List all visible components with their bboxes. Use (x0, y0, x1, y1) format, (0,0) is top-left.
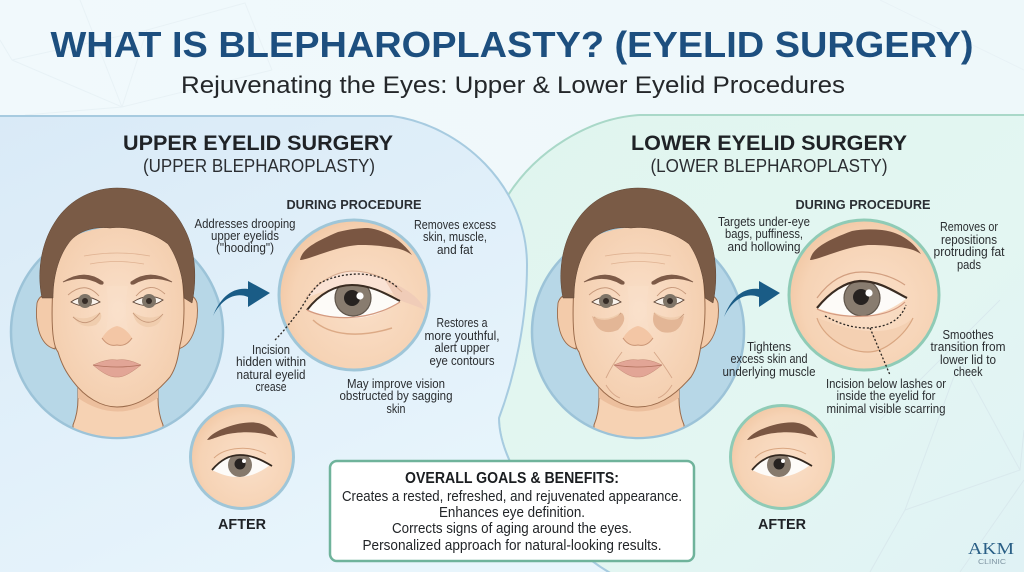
logo: AKM (968, 539, 1014, 558)
callout: targets: bags, puffiness, (725, 227, 803, 241)
logo (968, 539, 1014, 566)
callout: restores (424, 316, 500, 368)
illustration: after upper (190, 406, 294, 508)
callout: removes excess (414, 218, 496, 257)
logo: CLINIC (978, 559, 1006, 566)
arrow: upper (213, 281, 270, 316)
callout: overall goals and benefits: Creates a rested, refreshed, and rejuvenated appearance. (342, 489, 682, 505)
callout: incision lower: Incision below lashes or (826, 377, 946, 391)
arrow: lower (724, 281, 780, 317)
heading: during procedure upper: DURING PROCEDURE (286, 197, 422, 212)
callout: removes or repositions (934, 220, 1005, 272)
illustration: after lower (730, 406, 834, 508)
callout: overall goals and benefits (330, 461, 694, 561)
callout: smoothes: cheek (954, 365, 983, 379)
callout: smoothes: lower lid to (940, 353, 996, 367)
callout: drooping: Addresses drooping (194, 217, 296, 231)
callout: restores: alert upper (434, 341, 490, 355)
heading: upper eyelid surgery: UPPER EYELID SURGERY (123, 131, 393, 155)
heading: upper eyelid surgery (123, 131, 393, 176)
callout: tightens: Tightens (747, 340, 791, 354)
callout: incision lower: minimal visible scarring (826, 402, 946, 416)
illustration: upper eye during procedure (275, 220, 429, 370)
callout: incision upper: crease (256, 380, 286, 394)
label: after upper: AFTER (218, 517, 267, 533)
callout: vision (340, 377, 452, 416)
heading: lower eyelid surgery (631, 131, 907, 176)
callout: drooping: ("hooding") (216, 241, 274, 255)
callout: targets (718, 215, 810, 254)
callout: overall goals and benefits: Corrects signs of aging around the eyes. (392, 521, 632, 537)
callout: incision upper (236, 343, 306, 394)
callout: removes or repositions: pads (957, 258, 981, 272)
heading: during procedure lower: DURING PROCEDURE (796, 197, 931, 212)
illustration: face before upper surgery (11, 188, 223, 445)
callout: tightens (722, 340, 816, 379)
callout: smoothes: Smoothes (942, 328, 994, 342)
callout: vision: obstructed by sagging (340, 389, 452, 403)
callout: removes excess: Removes excess (414, 218, 496, 232)
callouts: upper eyelid (194, 217, 500, 416)
callout: tightens: excess skin and (730, 352, 808, 366)
callout: incision lower (826, 377, 946, 416)
callout: incision lower: inside the eyelid for (836, 389, 936, 403)
heading: upper eyelid surgery: (UPPER BLEPHAROPLASTY) (143, 156, 375, 176)
callout: restores: eye contours (430, 354, 494, 368)
illustration: lower eye during procedure (789, 220, 939, 375)
callout: overall goals and benefits: OVERALL GOALS & BENEFITS: (405, 470, 619, 487)
callout: vision: May improve vision (347, 377, 445, 391)
decorative network lines lower right (870, 300, 1024, 572)
subtitle: Rejuvenating the Eyes: Upper & Lower Eyelid Procedures (181, 72, 845, 99)
callout: drooping: upper eyelids (211, 229, 279, 243)
callout: incision upper: hidden within (236, 355, 306, 369)
callout: restores: more youthful, (424, 329, 500, 343)
callout: drooping (194, 217, 296, 255)
callout: removes excess: skin, muscle, (423, 230, 487, 244)
callout: targets: Targets under-eye (718, 215, 810, 229)
decorative network lines (0, 0, 1024, 115)
panel: lower eyelid surgery (499, 115, 1024, 572)
callout: removes excess: and fat (437, 243, 473, 257)
callout: tightens: underlying muscle (722, 365, 816, 379)
panel: upper eyelid surgery (0, 116, 612, 572)
callout: incision upper: Incision (252, 343, 290, 357)
title: WHAT IS BLEPHAROPLASTY? (EYELID SURGERY) (50, 24, 973, 65)
callout: smoothes: transition from (930, 340, 1006, 354)
callout: vision: skin (386, 402, 406, 416)
callout: smoothes (930, 328, 1006, 379)
callout: restores: Restores a (436, 316, 488, 330)
callouts: lower eyelid (718, 215, 1006, 416)
illustration: face before lower surgery (532, 188, 744, 445)
heading: lower eyelid surgery: LOWER EYELID SURGERY (631, 131, 907, 155)
callout: removes or repositions: repositions (941, 233, 997, 247)
callout: overall goals and benefits: Enhances eye definition. (439, 505, 585, 521)
callout: targets: and hollowing (728, 240, 800, 254)
label: after lower: AFTER (758, 517, 807, 533)
callout: overall goals and benefits: Personalized approach for natural-looking results. (362, 538, 662, 554)
callout: incision upper: natural eyelid (236, 368, 306, 382)
callout: removes or repositions: protruding fat (934, 245, 1005, 259)
callout: removes or repositions: Removes or (940, 220, 998, 234)
heading: lower eyelid surgery: (LOWER BLEPHAROPLASTY) (650, 156, 888, 176)
